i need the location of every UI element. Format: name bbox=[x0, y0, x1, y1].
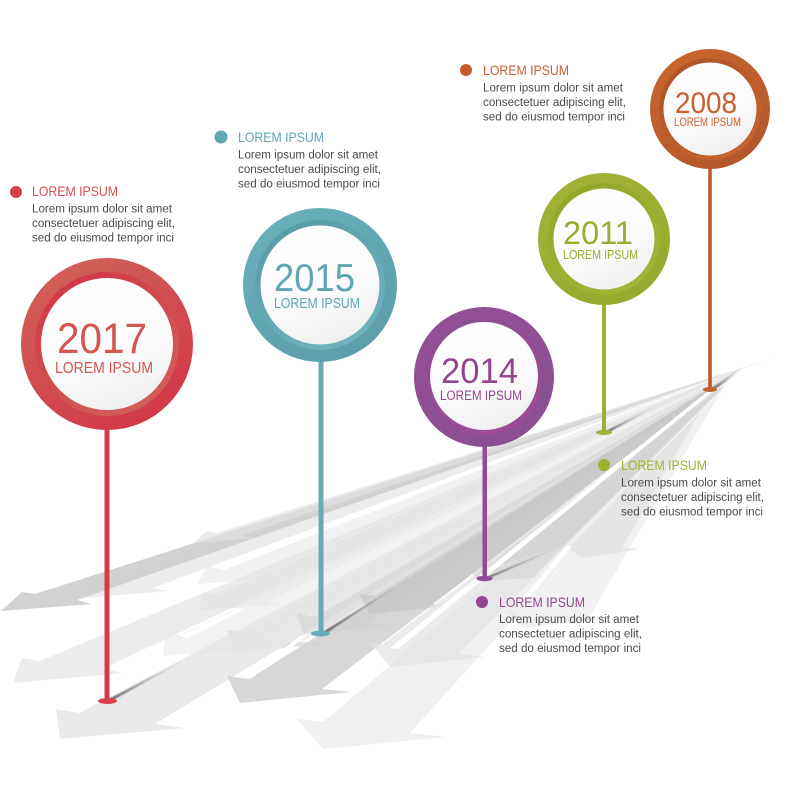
label: LOREM IPSUM bbox=[274, 296, 360, 312]
body: consectetuer adipiscing elit, bbox=[621, 492, 764, 504]
body: consectetuer adipiscing elit, bbox=[32, 218, 175, 230]
ring bbox=[414, 307, 554, 447]
arrow: front wide bbox=[297, 385, 725, 749]
label: LOREM IPSUM bbox=[674, 117, 741, 129]
text block: 2015 bbox=[214, 129, 381, 190]
body: Lorem ipsum dolor sit amet bbox=[483, 82, 624, 94]
body: sed do eiusmod tempor inci bbox=[499, 643, 641, 655]
heading: LOREM IPSUM bbox=[499, 594, 585, 610]
body: sed do eiusmod tempor inci bbox=[621, 506, 763, 518]
body: sed do eiusmod tempor inci bbox=[32, 232, 174, 244]
arrow: small dark near 2014 bbox=[470, 385, 725, 581]
road of perspective arrows bbox=[1, 357, 777, 749]
arrow: upper light 1 bbox=[197, 368, 742, 584]
label: LOREM IPSUM bbox=[440, 388, 522, 403]
heading: LOREM IPSUM bbox=[238, 129, 324, 145]
body: consectetuer adipiscing elit, bbox=[483, 97, 626, 109]
pole bbox=[104, 425, 110, 700]
body: sed do eiusmod tempor inci bbox=[238, 178, 380, 190]
ring bbox=[538, 173, 670, 305]
arrow: right light bbox=[565, 412, 700, 558]
foot bbox=[98, 698, 117, 704]
body: Lorem ipsum dolor sit amet bbox=[621, 478, 762, 490]
ring bbox=[21, 258, 193, 430]
year: 2008 bbox=[675, 87, 737, 120]
arrow: lower mid bbox=[371, 385, 725, 667]
text block: 2017 bbox=[10, 183, 175, 244]
heading: LOREM IPSUM bbox=[32, 183, 118, 199]
bullet bbox=[460, 64, 472, 76]
pole bbox=[708, 160, 712, 389]
pin: 2008 bbox=[650, 49, 770, 392]
arrow: centre grey bbox=[227, 368, 742, 653]
arrow: mid grey bbox=[297, 368, 742, 634]
year: 2015 bbox=[274, 257, 355, 300]
foot bbox=[311, 630, 330, 636]
arrow: faint streak over dark band bbox=[193, 357, 777, 543]
body: sed do eiusmod tempor inci bbox=[483, 112, 625, 124]
body: consectetuer adipiscing elit, bbox=[238, 164, 381, 176]
arrow: large dark bbox=[227, 368, 742, 703]
arrow: upper light 2 bbox=[198, 368, 742, 611]
label: LOREM IPSUM bbox=[563, 248, 638, 262]
disc bbox=[664, 62, 756, 156]
body: Lorem ipsum dolor sit amet bbox=[238, 150, 379, 162]
arrow: light upper bbox=[83, 368, 742, 598]
pin: 2014 bbox=[414, 307, 554, 581]
bullet bbox=[214, 130, 228, 144]
pole bbox=[602, 295, 606, 432]
body: consectetuer adipiscing elit, bbox=[499, 628, 642, 640]
heading: LOREM IPSUM bbox=[483, 62, 569, 78]
disc bbox=[260, 226, 380, 344]
text block: 2014 bbox=[476, 594, 642, 655]
text block: 2011 bbox=[598, 457, 764, 518]
ring bbox=[650, 49, 770, 169]
arrow: dark top bbox=[1, 368, 742, 611]
year: 2017 bbox=[57, 315, 147, 363]
arrow: wide left bbox=[13, 368, 742, 683]
label: LOREM IPSUM bbox=[55, 360, 153, 377]
heading: LOREM IPSUM bbox=[621, 457, 707, 473]
disc bbox=[554, 188, 654, 290]
ring bbox=[243, 208, 397, 362]
text block: 2008 bbox=[460, 62, 626, 124]
white stripes between arrows bbox=[180, 368, 742, 678]
disc bbox=[41, 278, 173, 410]
pin shadows bbox=[109, 370, 742, 700]
pin: 2017 bbox=[21, 258, 193, 704]
arrow: grey wedge bbox=[490, 385, 725, 568]
arrow: lower light bbox=[505, 385, 725, 628]
bullet bbox=[476, 596, 488, 608]
foot bbox=[476, 576, 492, 581]
body: Lorem ipsum dolor sit amet bbox=[32, 204, 173, 216]
body: Lorem ipsum dolor sit amet bbox=[499, 614, 640, 626]
disc bbox=[430, 322, 538, 430]
foot bbox=[703, 387, 717, 392]
pole bbox=[482, 440, 487, 578]
arrow: front left bbox=[56, 368, 742, 739]
bullet bbox=[598, 459, 610, 471]
year: 2011 bbox=[563, 215, 633, 251]
pole bbox=[318, 355, 324, 633]
arrow: centre light bbox=[163, 368, 742, 656]
year: 2014 bbox=[441, 352, 518, 391]
bullet bbox=[10, 186, 22, 198]
foot bbox=[596, 430, 612, 435]
pin: 2011 bbox=[538, 173, 670, 435]
arrow: mid dark bbox=[360, 368, 742, 614]
pin: 2015 bbox=[243, 208, 397, 636]
